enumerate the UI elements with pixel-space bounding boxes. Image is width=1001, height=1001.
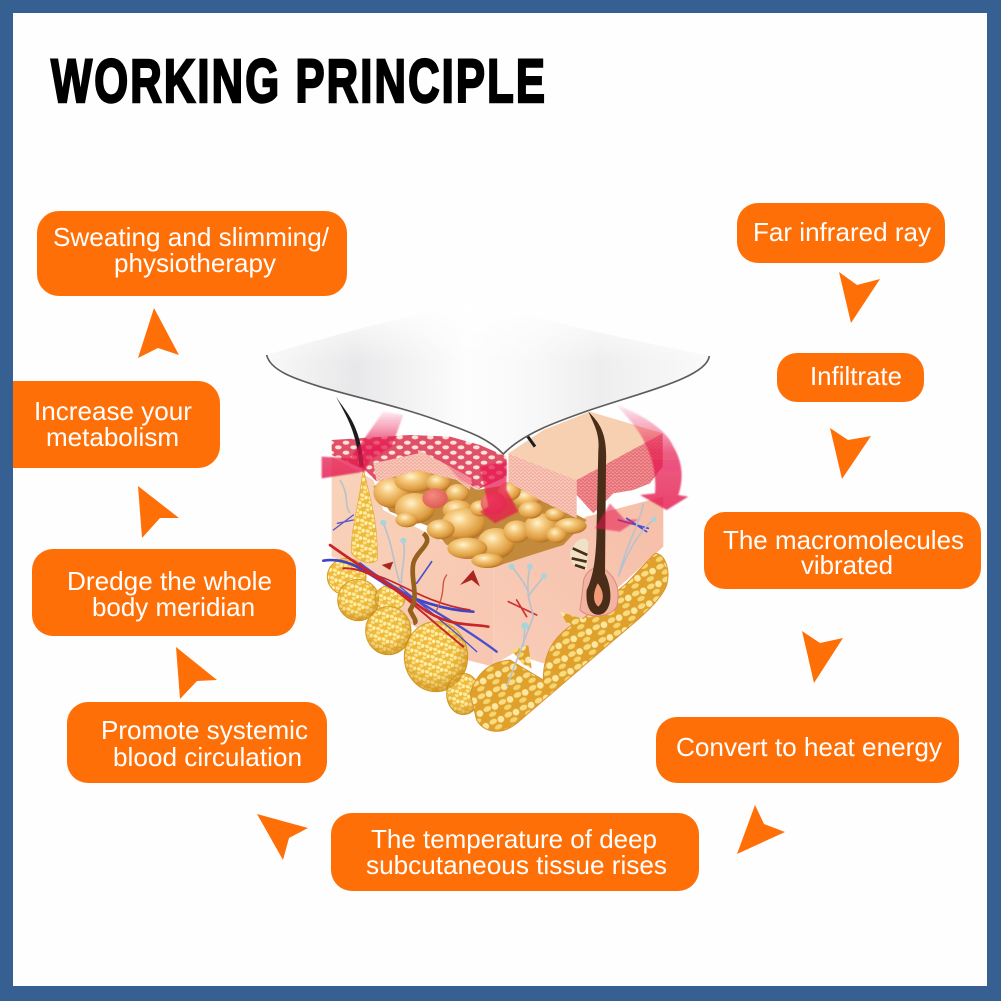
arrow: infiltrate to macromolecules bbox=[830, 428, 871, 479]
small vessel cut bbox=[460, 570, 480, 587]
heat arrow middle bbox=[480, 462, 518, 523]
epidermis side right bbox=[577, 433, 663, 513]
step: infiltrate: Infiltrate bbox=[810, 361, 902, 391]
skin top right surface bbox=[508, 412, 663, 480]
small fat patch bbox=[512, 645, 532, 668]
step: sweating and slimming: Sweating and slimming/ bbox=[53, 222, 330, 252]
arrow: circulation to meridian bbox=[176, 647, 217, 699]
step: macromolecules vibrated: vibrated bbox=[801, 550, 893, 580]
step: temperature rises: subcutaneous tissue rises bbox=[366, 850, 667, 880]
arrow: meridian to metabolism bbox=[138, 486, 179, 538]
heat arrow lower right bbox=[595, 503, 638, 532]
small vessel cut two bbox=[382, 562, 393, 570]
fat balls at lower left bbox=[327, 558, 480, 715]
hair stub center bbox=[527, 435, 535, 447]
hair shaft left bbox=[336, 397, 364, 467]
step: increase metabolism: Increase your bbox=[34, 396, 192, 426]
arrow: metabolism to sweating bbox=[138, 308, 179, 358]
step: increase metabolism: metabolism bbox=[46, 422, 179, 452]
step: convert to heat energy: Convert to heat energy bbox=[676, 732, 942, 762]
heat arrow middle tail bbox=[447, 465, 480, 490]
step: convert to heat energy bbox=[656, 717, 959, 783]
step: sweating and slimming bbox=[37, 211, 347, 296]
blood vessels bbox=[323, 515, 648, 652]
step: dredge meridian: Dredge the whole bbox=[67, 566, 272, 596]
honeycomb skin layer bbox=[332, 435, 507, 490]
step: macromolecules vibrated: The macromolecules bbox=[723, 525, 964, 555]
heat arrow left bbox=[322, 412, 403, 478]
step: promote blood circulation: blood circulation bbox=[113, 742, 302, 772]
sweat gland yellow column bbox=[351, 468, 377, 563]
nerve endings bbox=[380, 517, 657, 630]
arrow: temperature to circulation bbox=[257, 814, 308, 860]
illustration: skin cross-section with far infrared patch bbox=[267, 303, 709, 731]
follicle core bbox=[594, 583, 603, 607]
step: promote blood circulation bbox=[67, 702, 327, 783]
brown nerve bbox=[410, 533, 427, 623]
step: dredge meridian bbox=[32, 549, 296, 636]
step: sweating and slimming: physiotherapy bbox=[114, 248, 276, 278]
step: dredge meridian: body meridian bbox=[92, 592, 255, 622]
skin face left bbox=[332, 457, 493, 667]
epidermis front right bbox=[508, 453, 577, 518]
step: far infrared ray bbox=[737, 203, 945, 263]
fat patch by follicle bbox=[560, 612, 597, 630]
hair shaft right bbox=[586, 412, 610, 615]
sebaceous gland bbox=[570, 539, 588, 570]
step: infiltrate bbox=[777, 353, 924, 402]
step: macromolecules vibrated bbox=[704, 512, 981, 589]
fat strip at lower right bbox=[470, 553, 668, 731]
speckled dermis left bbox=[373, 450, 472, 490]
far infrared film patch bbox=[267, 303, 709, 454]
arrow: macromolecules to heat bbox=[802, 631, 843, 683]
arrow: heat to temperature bbox=[737, 805, 785, 854]
step: increase metabolism bbox=[13, 381, 220, 468]
sensory nerves bbox=[340, 480, 653, 687]
title: WORKING PRINCIPLE bbox=[51, 48, 547, 116]
step: far infrared ray: Far infrared ray bbox=[753, 217, 931, 247]
hair follicle bbox=[580, 567, 618, 616]
fat globule layer bbox=[373, 468, 587, 568]
step: temperature rises bbox=[331, 813, 699, 891]
heat arrow right bbox=[617, 405, 688, 510]
step: temperature rises: The temperature of deep bbox=[371, 824, 657, 854]
arrow: far infrared to infiltrate bbox=[839, 272, 880, 323]
step: promote blood circulation: Promote systemic bbox=[101, 715, 308, 745]
skin face right bbox=[493, 497, 663, 665]
